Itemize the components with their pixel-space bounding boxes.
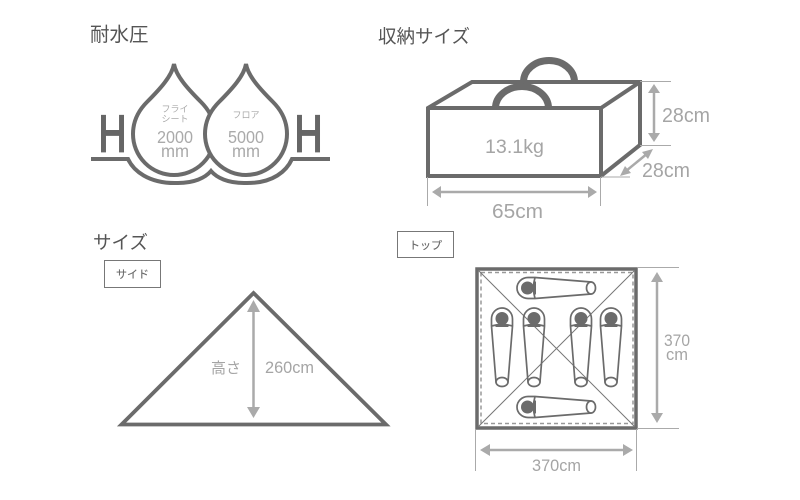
label box: top <box>398 232 454 258</box>
label: height: 高さ <box>211 360 241 377</box>
weight label: 13.1kg <box>485 136 544 158</box>
heading: size: サイズ <box>93 232 148 253</box>
dimension: width <box>476 429 636 471</box>
top view floor plan <box>476 268 690 475</box>
width value: 65cm <box>492 201 543 223</box>
height value: 260cm <box>265 359 314 377</box>
bag body <box>428 82 640 176</box>
sleeping bag: bottom <box>517 396 596 418</box>
carry bag diagram <box>428 60 710 223</box>
label box: side <box>104 260 160 288</box>
sleeping bags: vertical <box>492 308 622 386</box>
label: fly sheet: 2000 <box>157 127 193 147</box>
heading: water pressure: 耐水圧 <box>90 24 149 46</box>
dimension: depth <box>637 268 679 428</box>
depth value: 28cm <box>642 160 690 182</box>
depth value: cm <box>666 346 688 364</box>
depth value: 370 <box>664 332 690 350</box>
label: fly sheet: mm <box>161 141 189 161</box>
dimension: tent height <box>247 300 260 418</box>
height value: 28cm <box>662 105 710 127</box>
width value: 370cm <box>532 457 581 475</box>
label: floor: 5000 <box>228 127 264 147</box>
label box: top: トップ <box>409 239 442 252</box>
side view triangle <box>122 293 386 424</box>
label: fly sheet: シート <box>161 114 189 124</box>
label: floor <box>228 110 264 161</box>
dimension: height <box>640 82 671 146</box>
outer square <box>477 269 636 428</box>
label: fly sheet <box>157 104 193 161</box>
icon: right drop <box>205 64 287 175</box>
letter H left: H <box>98 106 126 164</box>
label box: side: サイド <box>116 268 149 281</box>
dimension: width <box>428 177 600 206</box>
bag front handle <box>496 86 548 108</box>
label: fly sheet: フライ <box>161 104 189 114</box>
label: floor: フロア <box>232 110 260 120</box>
heading: storage size: 収納サイズ <box>378 26 470 47</box>
dimension: depth <box>601 149 653 177</box>
icon: left drop <box>133 64 215 175</box>
letter H right: H <box>294 106 322 164</box>
water pressure diagram <box>91 64 330 183</box>
inner dashed floor <box>481 272 633 424</box>
bag back handle <box>524 60 574 82</box>
label: floor: mm <box>232 141 260 161</box>
ground line <box>91 159 330 183</box>
sleeping bag: top <box>517 278 596 298</box>
depth value <box>664 332 690 364</box>
diagonals <box>478 270 635 427</box>
